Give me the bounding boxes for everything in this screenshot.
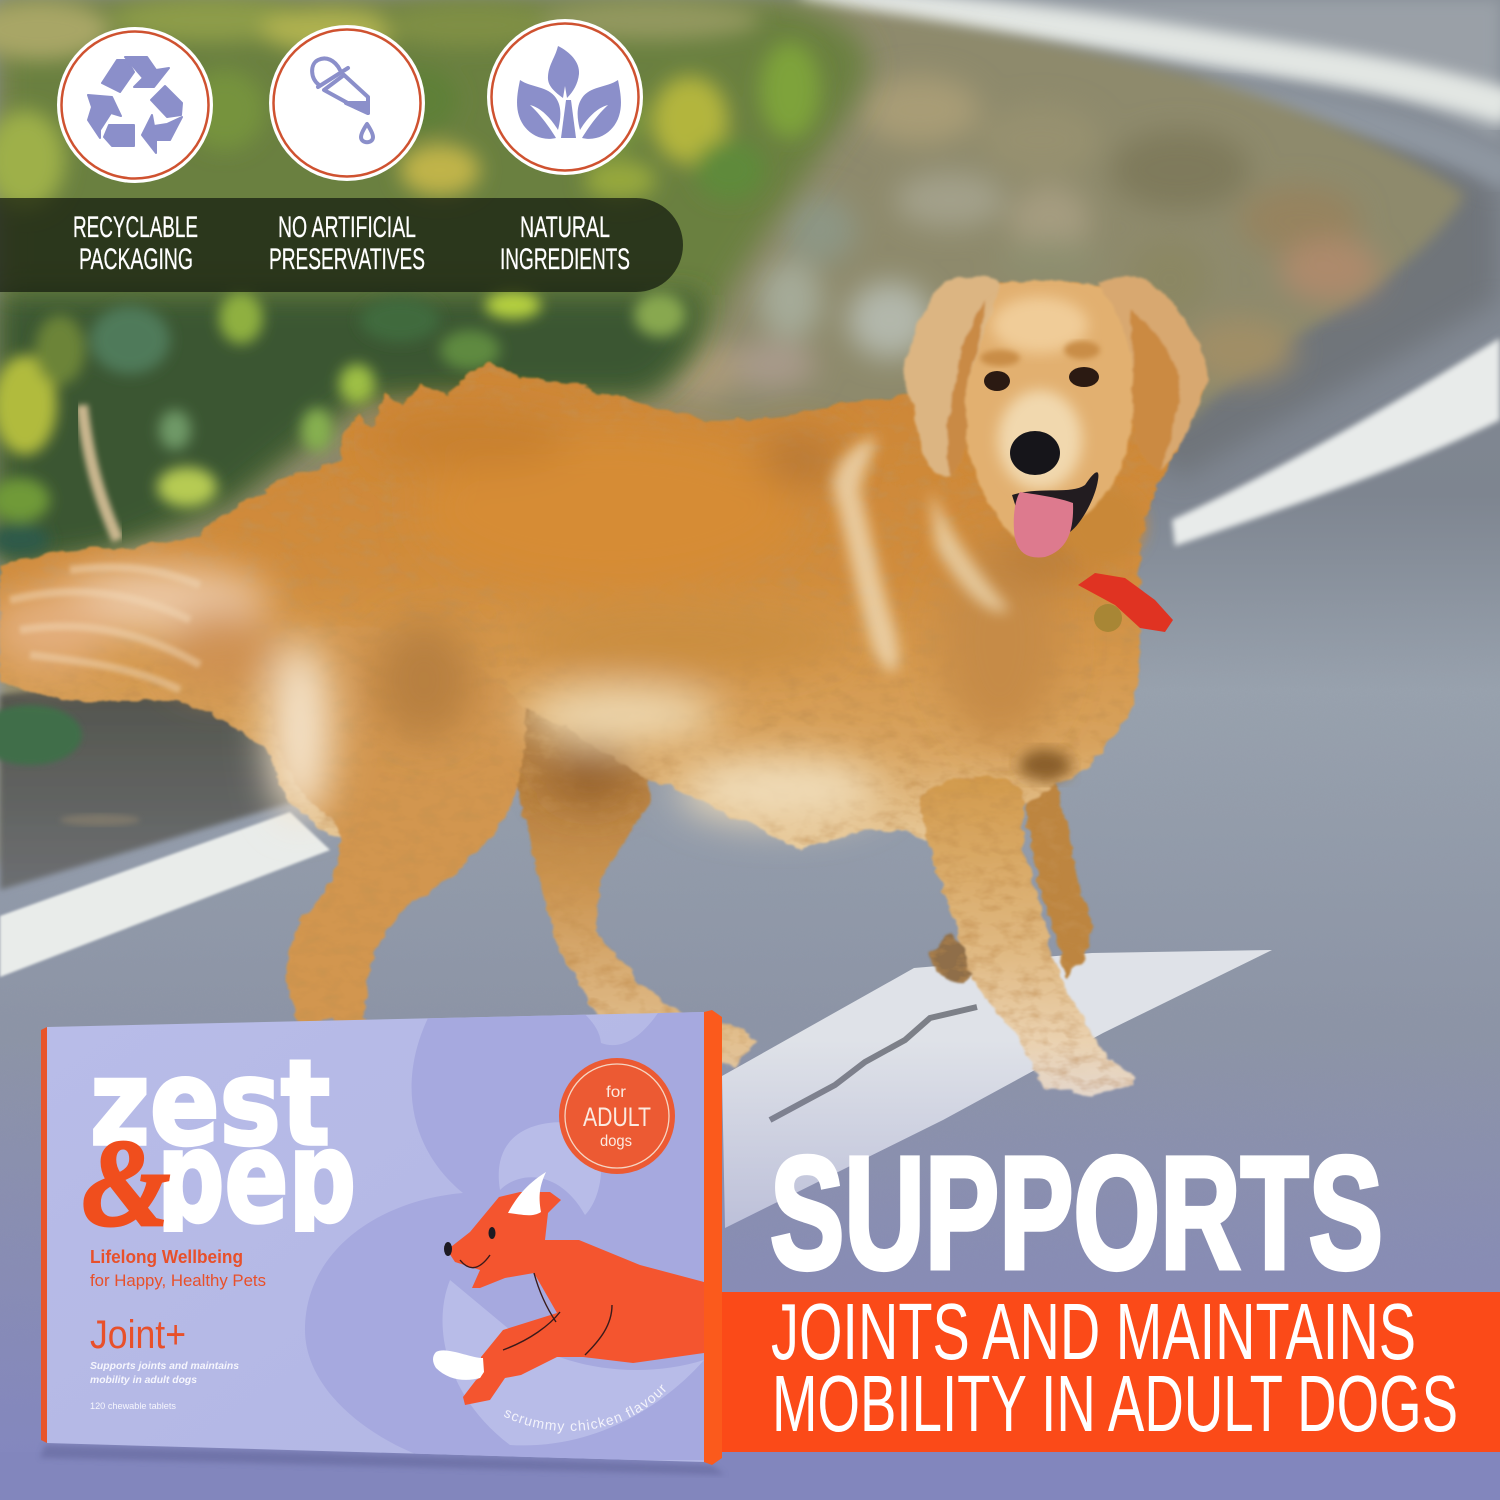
upper curved road line (800, 0, 1500, 108)
tail fur streaks (10, 567, 200, 690)
label (500, 211, 630, 276)
tongue (1014, 492, 1073, 558)
icon: leaves (517, 46, 621, 139)
label: NO ARTIFICIAL (278, 211, 416, 244)
adult dogs badge: for (606, 1084, 627, 1101)
road arrow marking (722, 950, 1272, 1228)
icon: dropper (312, 58, 373, 142)
dry leaf on verge (60, 814, 140, 826)
adult dogs badge (559, 1058, 675, 1174)
purple base strip (0, 1452, 1500, 1500)
dark label pill (0, 198, 683, 292)
dog body (447, 1192, 704, 1405)
dog body and legs with fur texture (0, 285, 1205, 1095)
badge (57, 27, 213, 183)
left road white line (0, 812, 330, 977)
white ear (508, 1172, 546, 1215)
lighter swirl (442, 1122, 704, 1445)
label (73, 211, 198, 276)
far front leg (1021, 785, 1092, 978)
lower-left dark verge (0, 660, 300, 890)
dry stalks (82, 405, 118, 540)
badge (487, 19, 643, 175)
dog illustration (433, 1172, 704, 1405)
left edge (41, 1027, 47, 1443)
face (965, 280, 1136, 545)
label: NATURAL (520, 211, 610, 244)
lower-left foliage (0, 705, 82, 765)
far hind leg (495, 700, 757, 1068)
right side panel (704, 1010, 722, 1465)
benefit: recyclable (57, 27, 213, 276)
bank colour patches (660, 76, 1380, 400)
lower foliage spots (0, 291, 686, 556)
tagline: for Happy, Healthy Pets (90, 1271, 266, 1290)
arrow crack (770, 1007, 977, 1120)
left ear (903, 277, 1000, 477)
box front (47, 1012, 704, 1462)
banner text (771, 1287, 1458, 1448)
pep word: pep (157, 1104, 356, 1251)
box shadow (40, 1445, 725, 1475)
white paw (433, 1350, 484, 1380)
product description: mobility in adult dogs (90, 1374, 197, 1386)
golden retriever photo illustration (0, 277, 1208, 1095)
adult dogs badge: ADULT (583, 1102, 651, 1132)
front colour (40, 1005, 710, 1470)
nose and eye (444, 1227, 496, 1256)
lower dark foliage (0, 295, 700, 565)
neck fluff (1065, 487, 1145, 563)
top benefits panel (0, 19, 683, 292)
product description (90, 1360, 239, 1386)
body, tail and neck (0, 285, 1205, 860)
product name: Joint+ (90, 1313, 186, 1357)
muzzle highlight (998, 390, 1082, 490)
brow shading (980, 341, 1100, 366)
nose (1010, 431, 1060, 475)
line work (460, 1255, 612, 1355)
banner bar (715, 1292, 1500, 1452)
road grain (0, 600, 1500, 1500)
blue-grey shoulder under line (1200, 90, 1500, 175)
benefit: natural ingredients (487, 19, 643, 276)
left ear inner (947, 300, 985, 476)
label: INGREDIENTS (500, 243, 630, 276)
fur shading (0, 412, 1090, 822)
label: RECYCLABLE (73, 211, 198, 244)
eyes (984, 367, 1099, 391)
label: PACKAGING (79, 243, 193, 276)
pale chest stripe (833, 437, 899, 672)
tablet count: 120 chewable tablets (90, 1401, 176, 1412)
far road at upper right (900, 0, 1500, 140)
tagline (90, 1247, 266, 1290)
dark chest shadow (1019, 749, 1071, 781)
bottom purple fade (0, 1040, 1500, 1500)
near hind leg (264, 624, 526, 1022)
right ear inner (1130, 310, 1181, 470)
background swirl shapes (305, 1010, 704, 1460)
roadside bank (0, 0, 1465, 865)
benefit: no artificial preservatives (269, 25, 425, 276)
badge (269, 25, 425, 181)
bell (1094, 604, 1122, 632)
icon: recycle arrows (88, 57, 182, 153)
zest word: zest (90, 1034, 330, 1172)
dog head (903, 277, 1208, 545)
adult dogs badge: dogs (600, 1133, 632, 1150)
near front leg (919, 776, 1135, 1095)
brand logo (83, 1060, 354, 1232)
pale ruff (930, 490, 1010, 612)
ampersand: & (82, 1115, 170, 1252)
dark gutter band (1000, 60, 1500, 480)
open mouth (1012, 472, 1098, 532)
green bush mass (0, 0, 867, 565)
orange claim banner (715, 1287, 1500, 1452)
forehead highlight (992, 297, 1088, 353)
product box (41, 1010, 722, 1476)
right ear (1098, 277, 1208, 470)
scrummy flavour curve text: scrummy chicken flavour (504, 1384, 666, 1434)
label: PRESERVATIVES (269, 243, 425, 276)
upper bush highlights (0, 0, 820, 210)
product description: Supports joints and maintains (90, 1360, 239, 1372)
red collar (1078, 573, 1173, 632)
right road white line (1172, 338, 1500, 546)
label (269, 211, 425, 276)
far front paw (930, 933, 985, 985)
tagline: Lifelong Wellbeing (90, 1247, 243, 1267)
